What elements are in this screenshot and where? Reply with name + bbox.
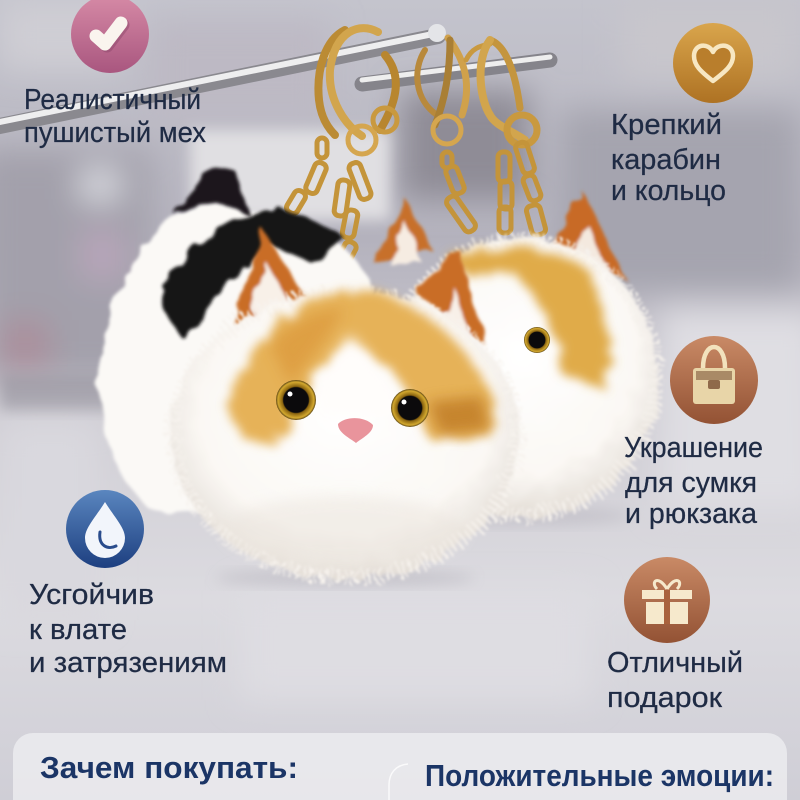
chains (285, 138, 547, 270)
feature text: water resistance: и затрязениям (29, 647, 227, 679)
icon: bag badge (670, 336, 758, 424)
hanging rods (0, 24, 550, 127)
feature text: water resistance (29, 579, 227, 679)
icon: water drop badge (66, 490, 144, 568)
feature text: carabiner: и кольцо (611, 175, 726, 207)
feature text: gift: подарок (607, 682, 723, 714)
ear left (232, 228, 308, 322)
feature text: fur (24, 84, 206, 149)
feature text: gift: Отличный (607, 647, 743, 679)
feature text: fur: пушистый мех (24, 117, 206, 149)
feature text: accessory: и рюкзака (625, 498, 757, 530)
feature text: accessory (624, 432, 763, 530)
ear right (415, 248, 488, 350)
feature text: carabiner: Крепкий (611, 109, 722, 141)
icon: check mark badge (71, 0, 149, 73)
eye left (276, 380, 316, 420)
feature text: accessory: для сумкя (625, 467, 757, 499)
back right cat (373, 192, 658, 526)
ears of back cat (373, 192, 625, 278)
nose (338, 418, 373, 443)
back left cat body with black patches (98, 165, 370, 520)
icon: heart badge (673, 23, 753, 103)
white forehead wedge (319, 335, 392, 418)
feature text: carabiner (611, 109, 726, 207)
feature text: water resistance: к влате (29, 614, 127, 646)
keyring rings (318, 28, 537, 154)
feature text: gift (607, 647, 743, 714)
front cat head (171, 228, 519, 586)
feature text: water resistance: Усгойчив (29, 579, 154, 611)
bottom panel (13, 733, 787, 800)
orange markings (228, 290, 494, 445)
feature text: fur: Реалистичный (24, 84, 201, 116)
eye right (391, 389, 429, 427)
icon: gift badge (624, 557, 710, 643)
feature text: accessory: Украшение (624, 432, 763, 464)
heading: why buy: Зачем покупать: (40, 750, 298, 785)
feature text: carabiner: карабин (611, 144, 721, 176)
fur ball (171, 291, 519, 579)
